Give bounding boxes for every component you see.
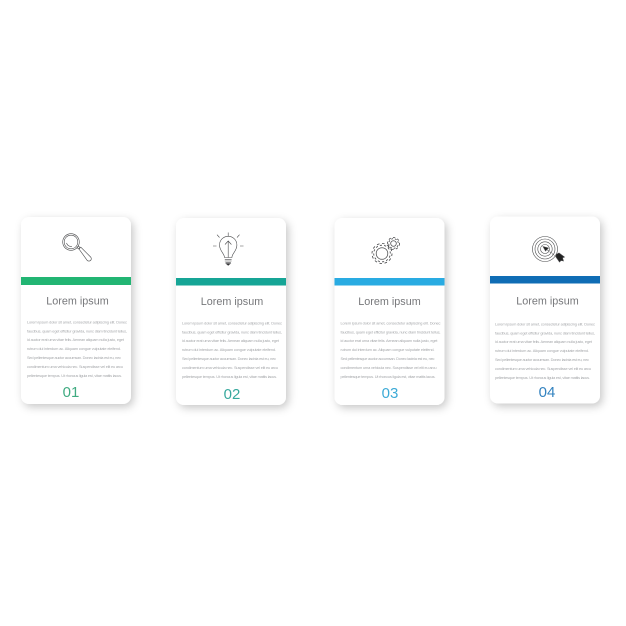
body text: condimentum urna vehicula nec. Suspendisse vel elit eu arcu [495,366,591,371]
body text [340,320,441,379]
panel: card 01 [21,217,131,404]
body text: faucibus, quam eget efficitur gravida, nunc diam tincidunt tellus, [340,330,440,334]
body text [495,322,595,380]
body text: rutrum dui interdum ac. Aliquam congue vulputate eleifend. [27,346,121,351]
step number: 02 [224,386,240,403]
color band [21,277,131,285]
body text: id auctor erat urna vitae felis. Aenean aliquam nulla justo, eget [27,337,125,342]
step number: 03 [382,385,398,402]
body text: rutrum dui interdum ac. Aliquam congue vulputate eleifend. [340,347,434,352]
heading: Lorem ipsum [516,296,579,308]
color band [334,278,444,286]
body text: pellentesque tempus. Ut rhoncus ligula est, vitae mattis lacus. [27,373,122,378]
body text: condimentum urna vehicula nec. Suspendisse vel elit eu arcu [182,365,278,370]
card 04 background [490,216,600,404]
color band [490,276,600,284]
body text: Sed pellentesque auctor accumsan. Donec lacinia est eu, nec [27,355,121,360]
color band [176,278,286,286]
body text: Lorem ipsum dolor sit amet, consectetur adipiscing elit. Donec [27,319,127,324]
body text: pellentesque tempus. Ut rhoncus ligula est, vitae mattis lacus. [182,374,277,379]
heading: Lorem ipsum [201,296,263,308]
panel: card 02 [176,218,286,405]
body text: condimentum urna vehicula nec. Suspendisse vel elit eu arcu [27,364,123,369]
icon: target with dart [532,236,564,262]
icon: light bulb [213,232,244,265]
body text: pellentesque tempus. Ut rhoncus ligula est, vitae mattis lacus. [495,375,590,380]
body text: id auctor erat urna vitae felis. Aenean aliquam nulla justo, eget [182,338,280,343]
card 02 background [176,218,286,405]
body text: Sed pellentesque auctor accumsan. Donec lacinia est eu, nec [182,356,276,361]
card 03 background [334,218,444,405]
body text: pellentesque tempus. Ut rhoncus ligula est, vitae mattis lacus. [340,374,436,379]
body text: Sed pellentesque auctor accumsan. Donec lacinia est eu, nec [340,356,435,361]
panel: card 04 [490,216,600,404]
icon: gears [372,238,400,264]
body text: Lorem ipsum dolor sit amet, consectetur adipiscing elit. Donec [340,320,441,326]
card 01 background [21,217,131,404]
body text: rutrum dui interdum ac. Aliquam congue vulputate eleifend. [495,348,589,353]
body text: faucibus, quam eget efficitur gravida, nunc diam tincidunt tellus, [27,328,127,333]
panel: card 03 [334,218,444,405]
step number: 01 [63,384,79,401]
body text: id auctor erat urna vitae felis. Aenean aliquam nulla justo, eget [495,339,593,344]
body text [182,320,282,379]
body text: id auctor erat urna vitae felis. Aenean aliquam nulla justo, eget [340,338,438,343]
icon: magnifying glass [63,234,91,261]
body text: faucibus, quam eget efficitur gravida, nunc diam tincidunt tellus, [495,330,595,336]
body text: rutrum dui interdum ac. Aliquam congue vulputate eleifend. [182,347,276,352]
body text: Lorem ipsum dolor sit amet, consectetur adipiscing elit. Donec [495,322,595,326]
body text: Lorem ipsum dolor sit amet, consectetur adipiscing elit. Donec [182,320,282,326]
heading: Lorem ipsum [358,296,421,308]
body text: condimentum urna vehicula nec. Suspendisse vel elit eu arcu [340,365,436,370]
heading: Lorem ipsum [46,296,109,308]
body text: faucibus, quam eget efficitur gravida, nunc diam tincidunt tellus, [182,330,282,334]
step number: 04 [539,384,555,401]
body text: Sed pellentesque auctor accumsan. Donec lacinia est eu, nec [495,357,589,362]
body text [27,319,127,378]
